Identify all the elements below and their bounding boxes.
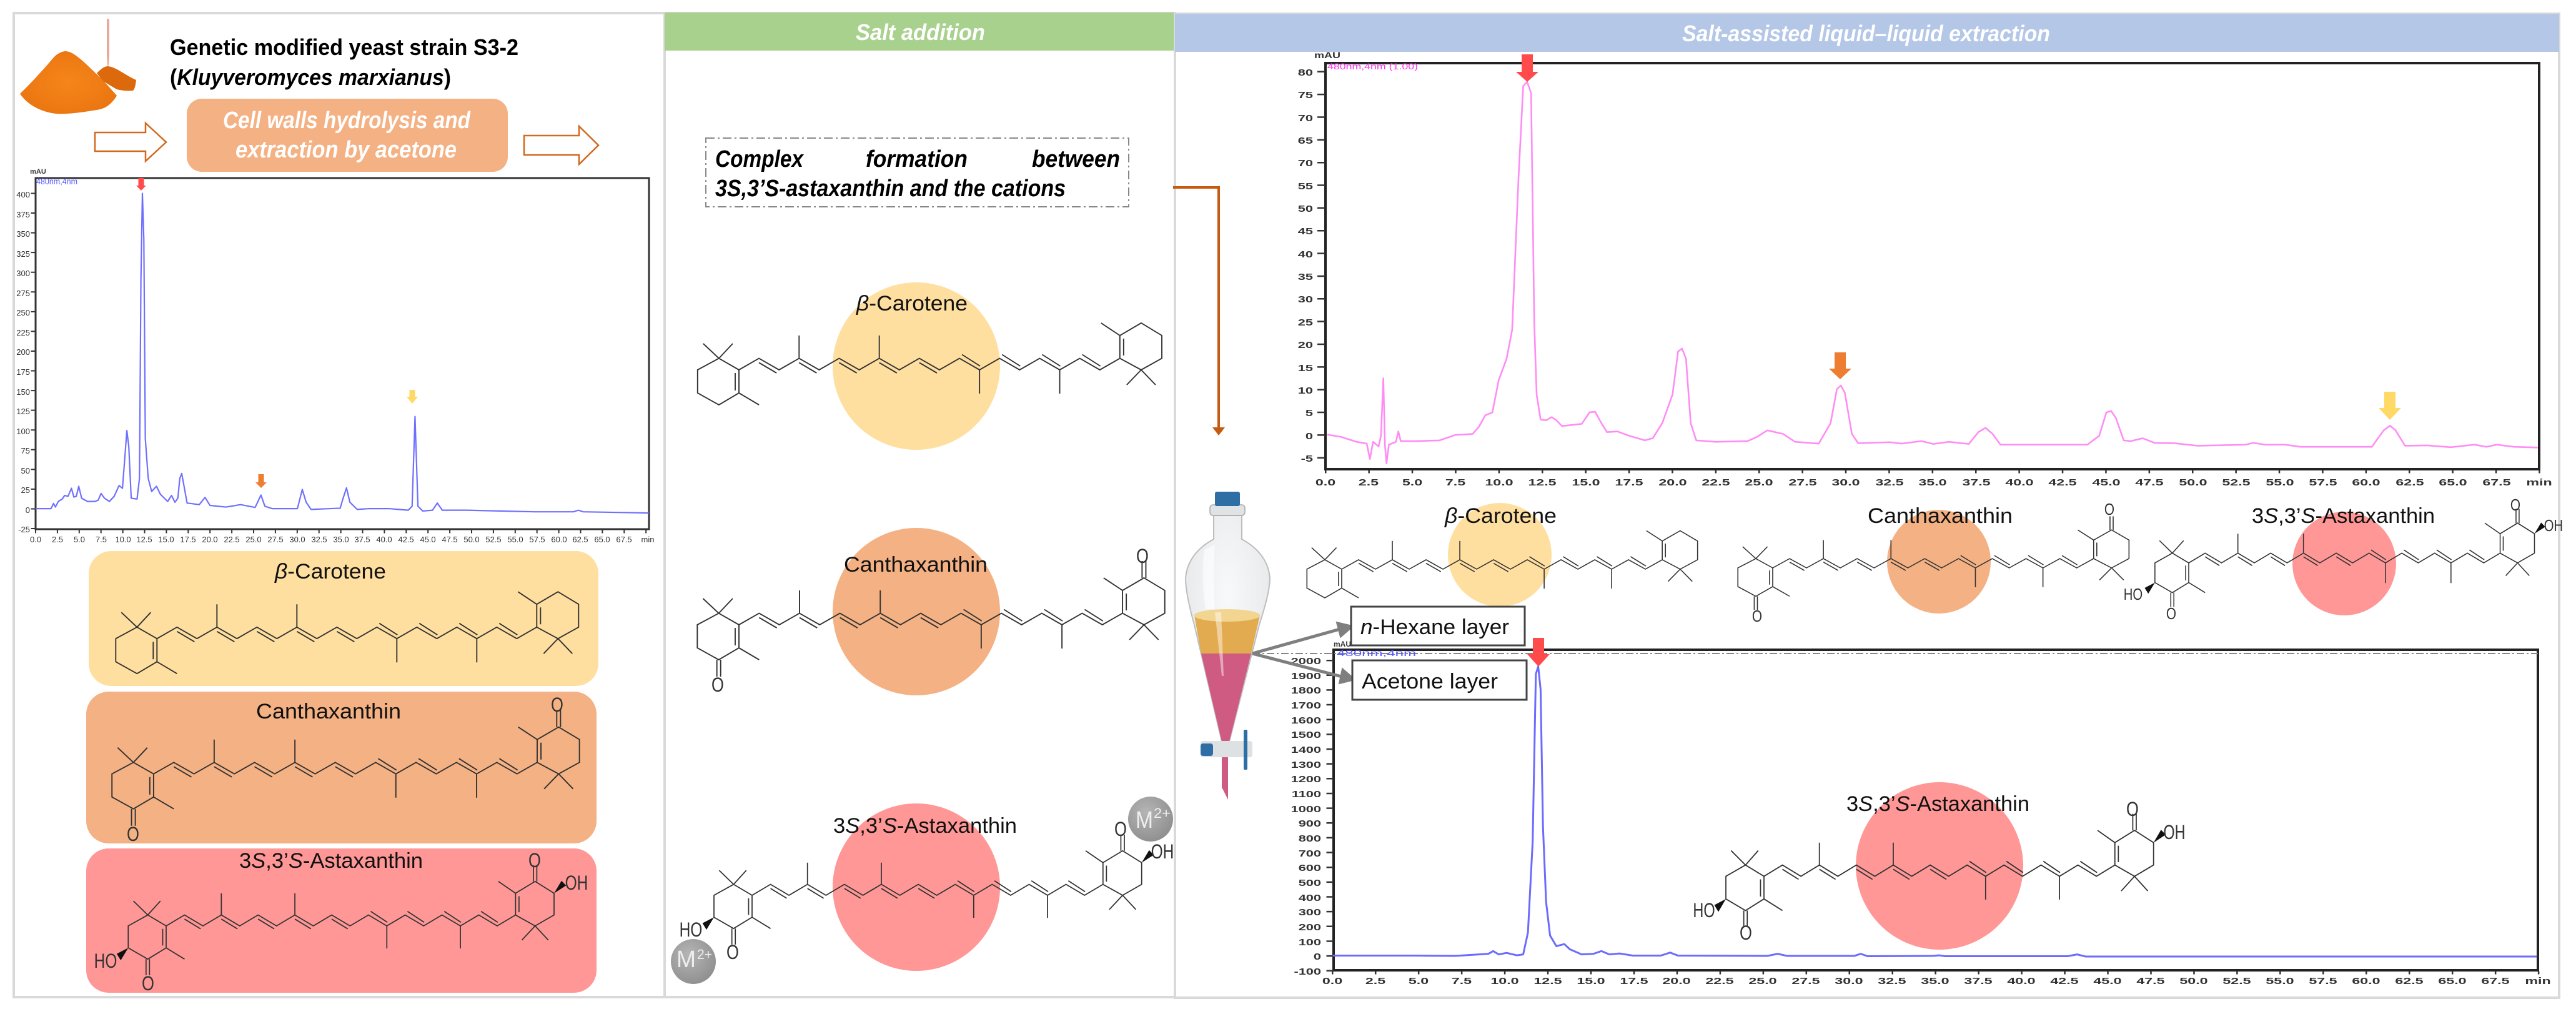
compound: astaxanthin with metal cations: O [726, 942, 739, 964]
compound card: astaxanthin: 3S,3’S-Astaxanthin [239, 849, 423, 873]
chart: n-hexane layer chromatogram: 50.0 [2179, 477, 2207, 488]
chart: crude extract chromatogram: 25.0 [245, 535, 262, 544]
callout: complex formation: 3S,3’S-astaxanthin and the cations [715, 176, 1066, 202]
chart: crude extract chromatogram: 60.0 [551, 535, 567, 544]
chart: n-hexane layer chromatogram: 65.0 [2439, 477, 2467, 488]
chart: acetone layer chromatogram: 25.0 [1748, 976, 1777, 987]
chart: acetone layer chromatogram: 1000 [1291, 803, 1321, 814]
chart: acetone layer chromatogram: 35.0 [1921, 976, 1949, 987]
chart: crude extract chromatogram: 47.5 [442, 535, 458, 544]
chart: acetone layer chromatogram: 0 [1314, 951, 1321, 962]
chart: crude extract chromatogram: 300 [16, 269, 30, 278]
chart: crude extract chromatogram: 275 [16, 289, 30, 298]
chart: n-hexane layer chromatogram: 55 [1298, 181, 1313, 191]
chart: n-hexane layer chromatogram: 75 [1298, 89, 1313, 100]
chart: crude extract chromatogram: 7.5 [96, 535, 107, 544]
chart: crude extract chromatogram: 30.0 [289, 535, 305, 544]
chart: acetone layer chromatogram: 10.0 [1490, 976, 1519, 987]
chart: n-hexane layer chromatogram: 15.0 [1572, 477, 1600, 488]
chart: crude extract chromatogram: 0.0 [30, 535, 41, 544]
compound: beta-carotene: β-Carotene [856, 292, 968, 316]
compound: hexane layer canthaxanthin: Canthaxanthin [1868, 504, 2013, 528]
chart: n-hexane layer chromatogram: 12.5 [1528, 477, 1557, 488]
compound: hexane layer canthaxanthin [1738, 500, 2129, 625]
chart: acetone layer chromatogram: 30.0 [1835, 976, 1863, 987]
chart: acetone layer chromatogram [1252, 638, 2551, 987]
chart: crude extract chromatogram: 12.5 [136, 535, 152, 544]
callout: complex formation: Complex [715, 146, 805, 172]
chart: acetone layer chromatogram: 500 [1299, 877, 1321, 888]
chart: crude extract chromatogram: 100 [16, 427, 30, 436]
chart: acetone layer chromatogram: 17.5 [1620, 976, 1648, 987]
chart: acetone layer chromatogram: 37.5 [1964, 976, 1993, 987]
compound card: astaxanthin [86, 848, 597, 995]
chart: n-hexane layer chromatogram: 30 [1298, 294, 1313, 304]
callout: complex formation: formation [866, 146, 968, 172]
chart: n-hexane layer chromatogram: 35.0 [1918, 477, 1947, 488]
chart: n-hexane layer chromatogram: 40.0 [2005, 477, 2034, 488]
arrow: to n-hexane layer [1252, 624, 1351, 654]
chart: n-hexane layer chromatogram [1298, 50, 2552, 488]
chart: crude extract chromatogram: 52.5 [485, 535, 502, 544]
chart: crude extract chromatogram: 40.0 [376, 535, 392, 544]
chart: acetone layer chromatogram: 50.0 [2179, 976, 2208, 987]
step: cell walls hydrolysis: Cell walls hydrolysis and [223, 107, 471, 134]
chart: crude extract chromatogram: 37.5 [354, 535, 370, 544]
chart: acetone layer chromatogram: 47.5 [2136, 976, 2165, 987]
chart: crude extract chromatogram: 50 [21, 466, 30, 475]
compound card: astaxanthin: O [142, 973, 154, 995]
chart: crude extract chromatogram: 50.0 [463, 535, 480, 544]
label: n-hexane layer: n-Hexane layer [1360, 615, 1509, 639]
compound: acetone layer astaxanthin: O [2126, 798, 2139, 821]
heading: yeast strain: Genetic modified yeast strain S3-2 [170, 34, 518, 60]
compound card: canthaxanthin: O [551, 694, 563, 717]
chart: n-hexane layer chromatogram: 22.5 [1702, 477, 1730, 488]
compound: beta-carotene [698, 282, 1162, 450]
compound: acetone layer astaxanthin: O [1740, 922, 1752, 945]
compound: canthaxanthin [697, 528, 1165, 697]
compound: hexane layer canthaxanthin: O [1752, 607, 1762, 625]
chart: acetone layer chromatogram: 57.5 [2309, 976, 2337, 987]
chart: acetone layer chromatogram: 55.0 [2266, 976, 2294, 987]
chart: n-hexane layer chromatogram: 57.5 [2309, 477, 2337, 488]
panel: yeast strain and crude extract [14, 13, 665, 997]
chart: acetone layer chromatogram: 62.5 [2395, 976, 2424, 987]
chart: crude extract chromatogram: 42.5 [398, 535, 414, 544]
chart: acetone layer chromatogram: min [2525, 976, 2551, 987]
chart: acetone layer chromatogram: 200 [1299, 922, 1321, 932]
heading: salt-assisted extraction [1175, 14, 2559, 52]
compound card: canthaxanthin: Canthaxanthin [256, 700, 401, 723]
chart: crude extract chromatogram: 55.0 [507, 535, 523, 544]
chart: acetone layer chromatogram: 1800 [1291, 685, 1321, 695]
compound: hexane layer astaxanthin: HO [2124, 585, 2143, 604]
chart: acetone layer chromatogram: 12.5 [1533, 976, 1562, 987]
chart: crude extract chromatogram: 20.0 [202, 535, 218, 544]
heading: yeast strain [170, 34, 518, 90]
chart: crude extract chromatogram: 2.5 [52, 535, 63, 544]
arrow: to acetone layer [1252, 654, 1353, 682]
panel: salt-assisted liquid-liquid extraction [1175, 14, 2563, 998]
chart: acetone layer chromatogram: 65.0 [2438, 976, 2467, 987]
chart: n-hexane layer chromatogram: 20 [1298, 339, 1313, 350]
icon: cation left: M [676, 947, 696, 973]
chart: crude extract chromatogram: 480nm,4nm [36, 176, 77, 186]
chart: crude extract chromatogram: 67.5 [616, 535, 632, 544]
chart: n-hexane layer chromatogram: 70 [1298, 112, 1313, 123]
chart: n-hexane layer chromatogram: 10 [1298, 385, 1313, 395]
chart: acetone layer chromatogram: 42.5 [2050, 976, 2079, 987]
chart: crude extract chromatogram: 62.5 [572, 535, 588, 544]
chart: acetone layer chromatogram: 1700 [1291, 700, 1321, 710]
chart: acetone layer chromatogram: 300 [1299, 907, 1321, 917]
chart: crude extract chromatogram: 32.5 [311, 535, 327, 544]
chart: crude extract chromatogram: min [642, 535, 654, 544]
chart: n-hexane layer chromatogram: 80 [1298, 67, 1313, 77]
chart: acetone layer chromatogram: 22.5 [1705, 976, 1734, 987]
step: cell walls hydrolysis [187, 99, 508, 172]
chart: crude extract chromatogram: 57.5 [529, 535, 545, 544]
chart: n-hexane layer chromatogram: 0.0 [1315, 477, 1335, 488]
chart: crude extract chromatogram: 5.0 [74, 535, 85, 544]
chart: crude extract chromatogram: 65.0 [594, 535, 610, 544]
label: acetone layer [1352, 660, 1527, 700]
chart: n-hexane layer chromatogram: 7.5 [1445, 477, 1465, 488]
compound: canthaxanthin: Canthaxanthin [844, 553, 988, 577]
compound: acetone layer astaxanthin [1693, 782, 2186, 950]
chart: crude extract chromatogram: 150 [16, 387, 30, 397]
compound: acetone layer astaxanthin: OH [2163, 822, 2186, 844]
chart: n-hexane layer chromatogram: -5 [1301, 453, 1313, 464]
chart: crude extract chromatogram: 35.0 [333, 535, 349, 544]
arrow: to hydrolysis [95, 123, 166, 161]
compound card: canthaxanthin: O [127, 823, 139, 846]
chart: crude extract chromatogram [16, 168, 654, 544]
chart: acetone layer chromatogram: 2000 [1291, 655, 1321, 666]
callout: complex formation: between [1032, 146, 1120, 172]
chart: n-hexane layer chromatogram: 35 [1298, 271, 1313, 282]
compound: hexane layer astaxanthin: OH [2544, 517, 2563, 535]
chart: n-hexane layer chromatogram: 5 [1305, 407, 1313, 418]
chart: acetone layer chromatogram: 1100 [1292, 788, 1321, 799]
chart: acetone layer chromatogram: mAU [1334, 640, 1351, 649]
compound: hexane layer astaxanthin: O [2166, 605, 2176, 623]
chart: n-hexane layer chromatogram: 55.0 [2266, 477, 2294, 488]
chart: n-hexane layer chromatogram: 5.0 [1402, 477, 1422, 488]
icon: cation left [671, 939, 716, 984]
chart: acetone layer chromatogram: 480nm,4nm [1337, 648, 1416, 658]
chart: crude extract chromatogram: 15.0 [158, 535, 174, 544]
chart: crude extract chromatogram: 225 [16, 328, 30, 337]
compound: canthaxanthin: O [711, 674, 724, 697]
chart: acetone layer chromatogram: 1600 [1291, 715, 1321, 725]
chart: acetone layer chromatogram: 900 [1299, 818, 1321, 828]
chart: crude extract chromatogram: 250 [16, 308, 30, 317]
chart: n-hexane layer chromatogram: 42.5 [2048, 477, 2077, 488]
chart: n-hexane layer chromatogram: 62.5 [2395, 477, 2424, 488]
chart: acetone layer chromatogram: 100 [1299, 937, 1321, 947]
compound: hexane layer astaxanthin: O [2510, 496, 2520, 514]
compound: hexane layer beta-carotene [1307, 503, 1698, 607]
compound: astaxanthin with metal cations: OH [1151, 841, 1174, 863]
chart: acetone layer chromatogram: 1500 [1291, 729, 1321, 740]
chart: acetone layer chromatogram: 1300 [1291, 759, 1321, 770]
compound: acetone layer astaxanthin: 3S,3’S-Astaxanthin [1846, 792, 2029, 816]
chart: crude extract chromatogram: 27.5 [267, 535, 284, 544]
compound: canthaxanthin: O [1136, 545, 1149, 568]
chart: crude extract chromatogram: 375 [16, 210, 30, 219]
chart: acetone layer chromatogram: 2.5 [1365, 976, 1385, 987]
chart: n-hexane layer chromatogram: 2.5 [1359, 477, 1379, 488]
chart: n-hexane layer chromatogram: 45 [1298, 226, 1313, 236]
chart: crude extract chromatogram: 400 [16, 190, 30, 199]
chart: acetone layer chromatogram: 800 [1299, 833, 1321, 843]
callout: complex formation [706, 138, 1129, 207]
chart: acetone layer chromatogram: 600 [1299, 862, 1321, 873]
heading: yeast strain: (Kluyveromyces marxianus) [170, 64, 451, 90]
chart: crude extract chromatogram: 325 [16, 249, 30, 259]
chart: acetone layer chromatogram: 45.0 [2093, 976, 2122, 987]
chart: n-hexane layer chromatogram: 25.0 [1745, 477, 1773, 488]
chart: n-hexane layer chromatogram: 47.5 [2135, 477, 2164, 488]
chart: acetone layer chromatogram: 400 [1299, 892, 1321, 903]
heading: salt addition: Salt addition [856, 19, 985, 45]
chart: crude extract chromatogram: 45.0 [420, 535, 436, 544]
chart: acetone layer chromatogram: 60.0 [2352, 976, 2380, 987]
chart: n-hexane layer chromatogram: min [2526, 477, 2552, 488]
chart: acetone layer chromatogram: 1200 [1291, 773, 1321, 784]
chart: crude extract chromatogram: -25 [18, 525, 30, 534]
compound card: astaxanthin: O [528, 850, 541, 872]
compound: astaxanthin with metal cations: O [1114, 818, 1127, 841]
chart: n-hexane layer chromatogram: 60.0 [2352, 477, 2380, 488]
chart: n-hexane layer chromatogram: 45.0 [2092, 477, 2121, 488]
icon: orange yeast powder [20, 19, 136, 114]
chart: acetone layer chromatogram: 52.5 [2222, 976, 2251, 987]
chart: acetone layer chromatogram: 1900 [1291, 670, 1321, 681]
compound: astaxanthin with metal cations: 3S,3’S-Astaxanthin [833, 814, 1017, 838]
chart: acetone layer chromatogram: -100 [1294, 966, 1321, 977]
compound card: beta-carotene [89, 551, 598, 686]
chart: n-hexane layer chromatogram: 10.0 [1485, 477, 1513, 488]
arrow: to salt addition [524, 126, 598, 164]
icon: separatory funnel [1186, 492, 1270, 800]
chart: n-hexane layer chromatogram: 0 [1305, 430, 1313, 441]
chart: n-hexane layer chromatogram: 20.0 [1658, 477, 1687, 488]
chart: crude extract chromatogram: 10.0 [115, 535, 131, 544]
chart: acetone layer chromatogram: 20.0 [1662, 976, 1691, 987]
chart: n-hexane layer chromatogram: 40 [1298, 249, 1313, 259]
chart: n-hexane layer chromatogram: 17.5 [1615, 477, 1643, 488]
heading: salt-assisted extraction: Salt-assisted liquid–liquid extraction [1682, 21, 2050, 46]
chart: n-hexane layer chromatogram: 52.5 [2222, 477, 2251, 488]
chart: n-hexane layer chromatogram: 65 [1298, 135, 1313, 146]
compound card: canthaxanthin [86, 692, 597, 846]
icon: cation right: 2+ [1154, 805, 1171, 821]
arrow: salt addition to funnel [1173, 187, 1225, 435]
chart: acetone layer chromatogram: 40.0 [2007, 976, 2036, 987]
chart: n-hexane layer chromatogram: 37.5 [1962, 477, 1991, 488]
chart: crude extract chromatogram: 75 [21, 446, 30, 455]
chart: acetone layer chromatogram: 27.5 [1791, 976, 1820, 987]
panel: salt addition [665, 12, 1175, 997]
compound: hexane layer astaxanthin: 3S,3’S-Astaxanthin [2252, 504, 2435, 528]
chart: crude extract chromatogram: 350 [16, 229, 30, 239]
chart: acetone layer chromatogram: 0.0 [1322, 976, 1342, 987]
label: acetone layer: Acetone layer [1362, 670, 1498, 693]
compound: hexane layer beta-carotene: β-Carotene [1444, 504, 1557, 528]
chart: crude extract chromatogram: 25 [21, 485, 30, 495]
chart: n-hexane layer chromatogram: 480nm,4nm (1.00) [1327, 61, 1418, 71]
chart: crude extract chromatogram: 22.5 [224, 535, 240, 544]
label: n-hexane layer [1351, 607, 1525, 645]
chart: n-hexane layer chromatogram: 27.5 [1788, 477, 1817, 488]
icon: cation left: 2+ [697, 947, 712, 962]
compound card: astaxanthin: HO [94, 950, 117, 973]
chart: crude extract chromatogram: 175 [16, 367, 30, 377]
chart: acetone layer chromatogram: 32.5 [1878, 976, 1906, 987]
chart: n-hexane layer chromatogram: 30.0 [1831, 477, 1860, 488]
icon: cation right [1128, 797, 1173, 842]
chart: n-hexane layer chromatogram: 32.5 [1875, 477, 1904, 488]
step: cell walls hydrolysis: extraction by acetone [235, 137, 457, 163]
chart: crude extract chromatogram: 17.5 [180, 535, 196, 544]
chart: acetone layer chromatogram: 15.0 [1577, 976, 1605, 987]
chart: crude extract chromatogram: 200 [16, 347, 30, 357]
compound card: astaxanthin: OH [565, 872, 588, 895]
chart: n-hexane layer chromatogram: 50 [1298, 203, 1313, 214]
chart: acetone layer chromatogram: 5.0 [1409, 976, 1429, 987]
compound: acetone layer astaxanthin: HO [1693, 900, 1715, 922]
chart: crude extract chromatogram: 125 [16, 407, 30, 416]
chart: n-hexane layer chromatogram: mAU [1314, 50, 1340, 60]
compound: hexane layer astaxanthin [2124, 496, 2563, 623]
chart: n-hexane layer chromatogram: 70 [1298, 157, 1313, 168]
chart: acetone layer chromatogram: 1400 [1291, 744, 1321, 755]
chart: acetone layer chromatogram: 67.5 [2481, 976, 2510, 987]
compound: astaxanthin with metal cations [671, 797, 1174, 984]
chart: n-hexane layer chromatogram: 25 [1298, 317, 1313, 327]
chart: crude extract chromatogram: 0 [26, 505, 30, 515]
icon: cation right: M [1136, 807, 1153, 833]
chart: acetone layer chromatogram: 7.5 [1452, 976, 1472, 987]
chart: n-hexane layer chromatogram: 15 [1298, 362, 1313, 373]
compound: hexane layer canthaxanthin: O [2104, 500, 2114, 519]
compound card: beta-carotene: β-Carotene [274, 560, 386, 584]
chart: acetone layer chromatogram: 700 [1299, 848, 1321, 858]
heading: salt addition [665, 12, 1175, 51]
compound: astaxanthin with metal cations: HO [680, 919, 702, 942]
chart: n-hexane layer chromatogram: 67.5 [2482, 477, 2511, 488]
chart: crude extract chromatogram: mAU [30, 168, 46, 176]
